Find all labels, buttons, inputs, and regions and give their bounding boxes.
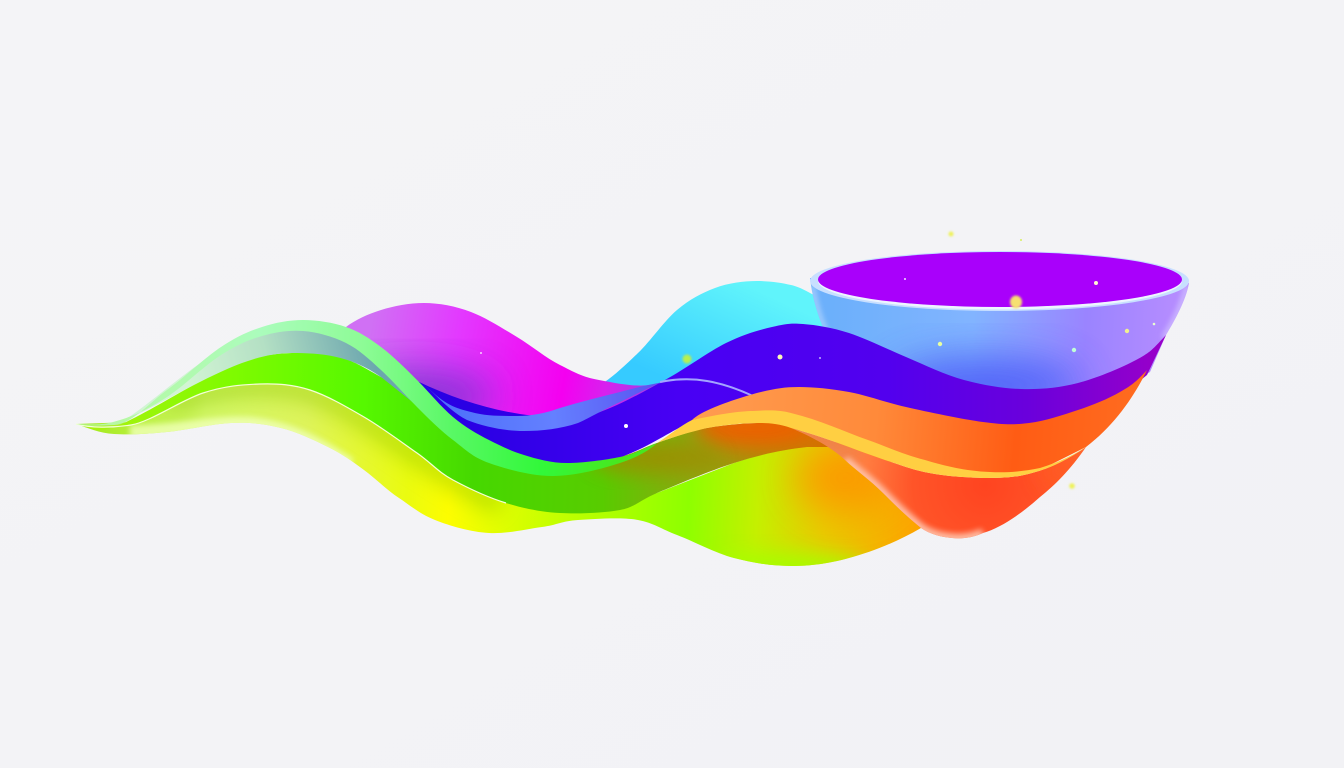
sparkle particles xyxy=(480,232,1155,489)
wave: light blue translucent band xyxy=(425,379,753,431)
wave: green middle layer xyxy=(76,353,830,513)
wave: bright green ribbon xyxy=(76,320,657,476)
white highlight line xyxy=(76,384,506,503)
wave: orange band xyxy=(692,370,1147,473)
bowl body xyxy=(810,278,1189,402)
bowl xyxy=(810,251,1189,390)
thin arc highlight xyxy=(660,379,753,396)
wave: yellow lime lower layer xyxy=(78,384,921,566)
bowl rim xyxy=(810,251,1189,311)
bowl inner purple xyxy=(818,252,1182,307)
wave: magenta back layer xyxy=(346,303,658,416)
bowl lower shading xyxy=(811,284,1188,390)
wave: cyan back layer xyxy=(600,281,825,405)
bowl rim highlight xyxy=(818,252,1182,310)
translucent veil between green bands xyxy=(120,325,425,423)
funnel: red orange tip xyxy=(785,426,1091,538)
funnel pale lower edge xyxy=(845,460,983,538)
wave: deep purple band xyxy=(415,324,1166,469)
wave: yellow stripe xyxy=(657,410,1086,478)
